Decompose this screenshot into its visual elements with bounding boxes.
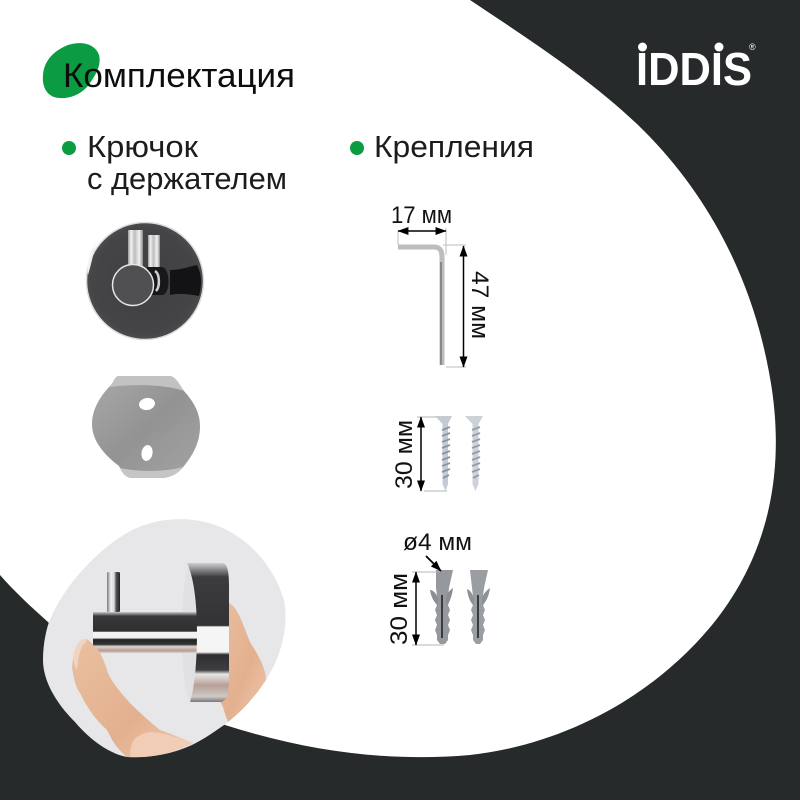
screws with dimension bbox=[391, 416, 483, 491]
column: fasteners heading bbox=[350, 129, 534, 164]
wall disc face bbox=[182, 563, 200, 701]
dimension label: 30 mm: 30 мм bbox=[386, 573, 413, 645]
hex key with dimensions bbox=[391, 202, 493, 367]
back finger bbox=[215, 603, 266, 722]
thumb bbox=[130, 732, 193, 757]
arrow to plug head bbox=[426, 556, 441, 571]
brand logo: IDDIS bbox=[636, 43, 752, 95]
fingernail bbox=[73, 639, 87, 670]
bullet bbox=[350, 141, 364, 155]
title with green blob bbox=[43, 43, 295, 98]
column: hook with holder bbox=[62, 129, 287, 196]
wall disc rim bbox=[187, 563, 229, 702]
wall plugs with dimension bbox=[386, 529, 490, 645]
hook barrel bbox=[93, 612, 197, 653]
plug 1 bbox=[430, 570, 453, 644]
heading: Комплектация bbox=[63, 57, 295, 95]
hand: thumb and index finger bbox=[72, 639, 193, 757]
column heading: Крепления bbox=[374, 129, 534, 164]
column heading: Крючок bbox=[87, 129, 198, 164]
photo: mounting bracket bbox=[92, 376, 200, 478]
green blob bbox=[43, 43, 100, 98]
brand logo: ® bbox=[749, 42, 756, 52]
hook pin bbox=[107, 572, 120, 612]
screw 2 bbox=[465, 416, 483, 491]
column heading: с держателем bbox=[87, 161, 287, 196]
screw 1 bbox=[435, 416, 452, 491]
photo background bbox=[43, 519, 286, 757]
dimension label: 30 mm: 30 мм bbox=[391, 420, 418, 489]
dimension label: 17 mm: 17 мм bbox=[391, 202, 452, 229]
dimension label: 47 mm: 47 мм bbox=[466, 271, 493, 339]
dimension label: diameter 4 mm: ø4 мм bbox=[403, 529, 472, 556]
photo blob: hook held in hand bbox=[43, 519, 286, 757]
bullet bbox=[62, 141, 76, 155]
photo: hook front view bbox=[86, 222, 204, 340]
plug 2 bbox=[467, 570, 490, 644]
